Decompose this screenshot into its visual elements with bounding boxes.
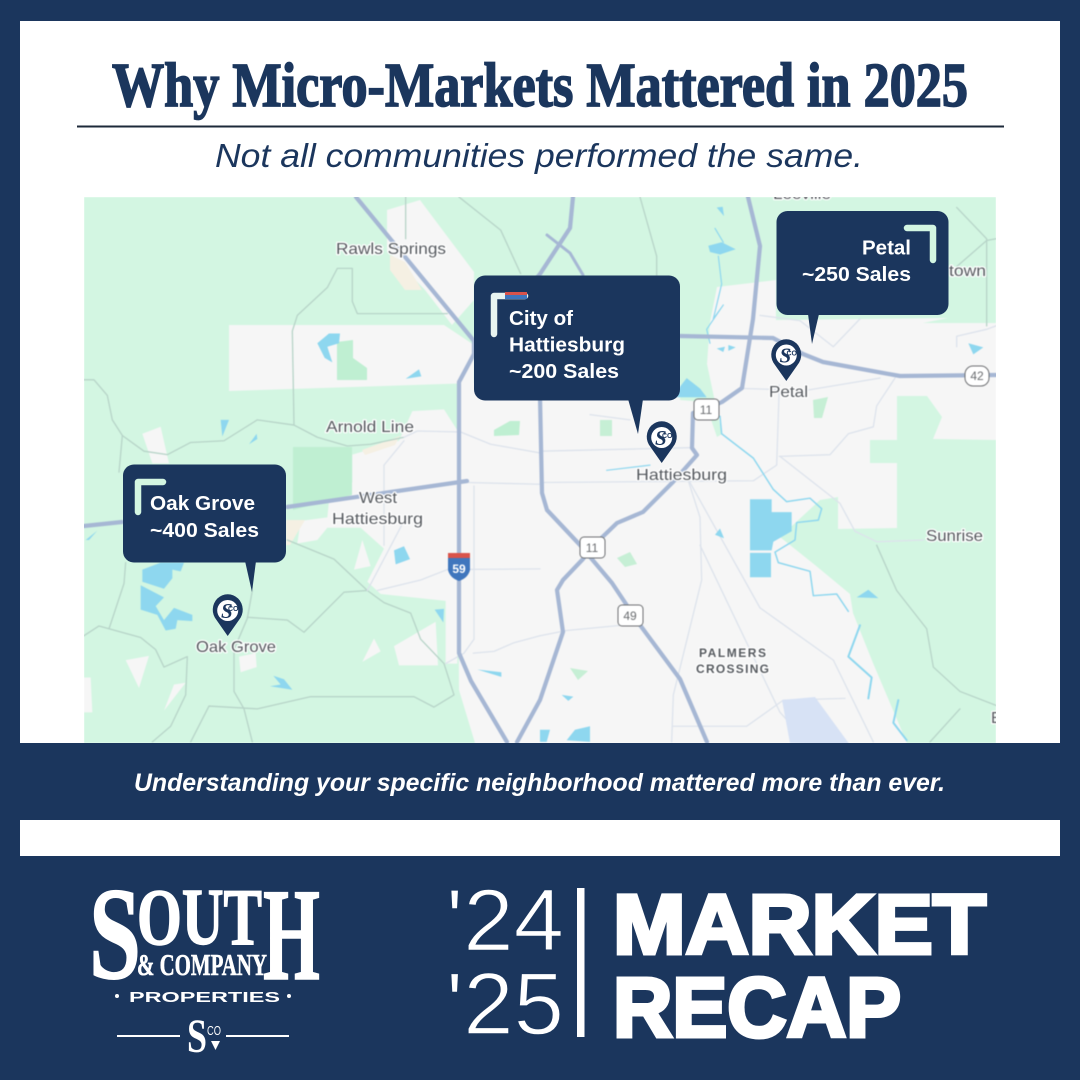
logo: South & Company Properties: S	[187, 1010, 207, 1063]
callout: Petal: Petal	[862, 238, 911, 260]
map place labels: Arnold Line	[326, 419, 414, 436]
map place labels: PALMERS	[699, 646, 766, 660]
map pin: Hattiesburg: S	[655, 426, 667, 450]
market recap wordmark	[613, 878, 986, 1054]
title rule	[77, 126, 1004, 128]
market recap wordmark: RECAP	[613, 960, 901, 1054]
map panel	[84, 186, 1002, 745]
years: '24 '25: '24	[446, 870, 564, 970]
years: '24 '25: '25	[446, 954, 564, 1053]
map pin: Oak Grove: S	[221, 599, 233, 623]
logo: South & Company Properties: CO	[207, 1023, 221, 1038]
urban land areas	[84, 200, 996, 743]
vertical divider	[577, 888, 584, 1037]
route shields: 42	[970, 369, 984, 383]
map place labels: Petal	[769, 384, 808, 401]
callout: Oak Grove	[123, 464, 286, 592]
logo: South & Company Properties: H	[263, 861, 320, 1008]
map pin: Hattiesburg	[647, 421, 677, 463]
route shields: 59	[452, 562, 466, 576]
highways	[84, 197, 996, 742]
callout: City of Hattiesburg: City of	[509, 308, 573, 330]
callout: City of Hattiesburg	[474, 276, 680, 434]
years: '24 '25	[446, 870, 564, 1053]
water	[86, 207, 983, 745]
callout: Petal: ~250 Sales	[802, 264, 911, 286]
map place labels: Oak Grove	[196, 639, 276, 656]
route shields: 11	[586, 541, 599, 555]
white content panel	[20, 21, 1060, 743]
callout: Petal	[776, 211, 948, 344]
callout: Oak Grove: ~400 Sales	[150, 520, 259, 542]
map place labels: Rawls Springs	[336, 241, 446, 258]
map pin: Petal: S	[780, 344, 791, 368]
logo: South & Company Properties: PROPERTIES	[129, 989, 280, 1006]
parks and tan patches	[286, 255, 828, 680]
map place labels: Hattiesburg	[636, 467, 727, 484]
map pin: Petal	[771, 339, 801, 381]
minor roads east	[540, 197, 996, 742]
map place labels: Sunrise	[926, 528, 983, 545]
map pin: Petal: CO	[786, 350, 798, 358]
map place labels	[196, 186, 1002, 727]
white strip	[20, 820, 1060, 856]
logo: South & Company Properties	[89, 860, 320, 1063]
market recap wordmark: MARKET	[613, 878, 986, 972]
route shields: 49	[623, 609, 637, 623]
map place labels: Leeville	[773, 186, 831, 203]
callout: City of Hattiesburg: Hattiesburg	[509, 334, 625, 356]
route shields: 11	[700, 403, 713, 417]
map pin: Oak Grove	[213, 594, 243, 636]
map pin: Hattiesburg: CO	[662, 433, 673, 440]
callout: City of Hattiesburg: ~200 Sales	[509, 361, 619, 383]
takeaway banner text: Understanding your specific neighborhood mattered more than ever.	[134, 769, 945, 797]
logo: South & Company Properties: & COMPANY	[137, 947, 267, 982]
map place labels: West	[359, 490, 398, 507]
route shields	[448, 366, 989, 626]
logo: South & Company Properties: S	[89, 860, 141, 1007]
river	[607, 228, 907, 740]
map place labels: town	[949, 263, 986, 280]
map place labels: Hattiesburg	[332, 511, 423, 528]
map pin: Oak Grove: CO	[228, 606, 239, 613]
callout: Oak Grove: Oak Grove	[150, 493, 255, 515]
subtitle: Not all communities performed the same.	[215, 137, 863, 174]
map place labels: E	[991, 710, 1002, 727]
map place labels: CROSSING	[696, 662, 769, 676]
minor roads west	[84, 197, 540, 742]
logo: South & Company Properties: OUT	[137, 874, 262, 962]
